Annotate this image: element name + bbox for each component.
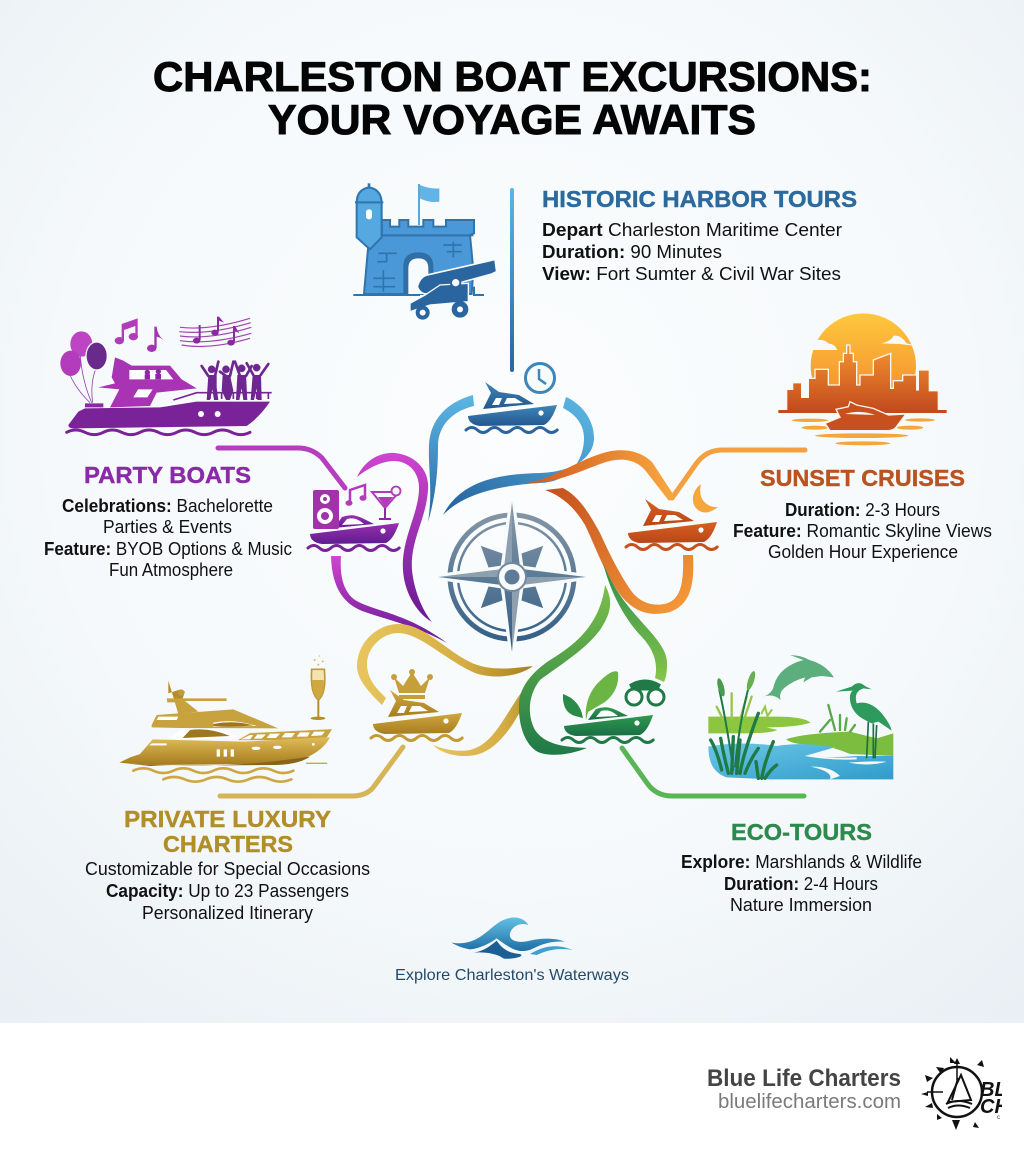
ribbon: blue left <box>428 395 474 522</box>
text block: party boats: Parties & Events <box>103 517 232 537</box>
text block: historic harbor tours: Duration: 90 Minutes <box>542 242 722 262</box>
icon: sunset skyline illustration <box>778 313 947 445</box>
connector: harbor tours <box>510 188 514 372</box>
icon: compass rose <box>436 500 588 654</box>
connector: eco-tours <box>622 748 804 796</box>
ribbon: purple lower <box>331 556 447 643</box>
text block: eco-tours: ECO-TOURS <box>731 819 872 845</box>
text block: party boats: Fun Atmosphere <box>109 560 233 580</box>
ribbon: gold right <box>433 663 548 756</box>
text block: private luxury charters: Customizable for Special Occasions <box>85 859 370 879</box>
text block: eco-tours: Nature Immersion <box>730 895 872 915</box>
icon: wave logo <box>452 918 573 959</box>
ribbon: purple right <box>357 453 432 622</box>
text block: sunset cruises: Duration: 2-3 Hours <box>785 500 940 520</box>
connector: sunset cruises <box>672 450 805 498</box>
icon: cocktail <box>372 486 400 519</box>
footer brand text: Blue Life Charters <box>707 1065 901 1092</box>
icon: eco boat with leaves and binoculars <box>562 671 664 742</box>
text block: historic harbor tours <box>542 186 857 284</box>
icon: marshland wildlife illustration <box>708 655 893 779</box>
footer logo: CH <box>980 1096 1009 1118</box>
text block: private luxury charters <box>85 806 370 923</box>
footer brand text <box>707 1065 901 1113</box>
ribbon: orange upper <box>527 450 675 501</box>
text block: eco-tours: Explore: Marshlands & Wildlife <box>681 852 922 872</box>
text block: private luxury charters: Personalized Itinerary <box>142 903 313 923</box>
text block: private luxury charters: CHARTERS <box>163 831 293 857</box>
footer logo <box>921 1057 1009 1130</box>
footer logo: c <box>997 1115 1000 1121</box>
text block: party boats: Feature: BYOB Options & Music <box>44 539 292 559</box>
connector: party boats <box>218 448 345 488</box>
caption: explore waterways: Explore Charleston's Waterways <box>395 967 629 984</box>
text block: sunset cruises: SUNSET CRUISES <box>760 465 965 491</box>
ribbon: blue right <box>443 397 594 515</box>
footer panel <box>0 1023 1024 1154</box>
text block: sunset cruises: Feature: Romantic Skyline Views <box>733 521 992 541</box>
text block: private luxury charters: PRIVATE LUXURY <box>124 806 331 832</box>
icon: clock <box>526 364 554 392</box>
text block: eco-tours <box>681 819 922 915</box>
title: YOUR VOYAGE AWAITS <box>268 96 756 143</box>
icon: sunset boat with moon <box>626 484 718 550</box>
connector: private charters <box>220 747 403 796</box>
title: CHARLESTON BOAT EXCURSIONS: <box>153 53 872 100</box>
ribbons around compass <box>331 395 693 756</box>
icon: fort and cannon <box>353 183 497 318</box>
text block: historic harbor tours: View: Fort Sumter & Civil War Sites <box>542 264 841 284</box>
icon: crown <box>391 669 433 699</box>
icon: luxury boat with crown <box>371 669 462 740</box>
text block: party boats: PARTY BOATS <box>84 462 251 488</box>
icon: moon <box>693 484 718 513</box>
text block: private luxury charters: Capacity: Up to 23 Passengers <box>106 881 349 901</box>
footer logo: BL <box>980 1079 1007 1101</box>
icon: speaker <box>313 490 339 529</box>
text block: historic harbor tours: Depart Charleston Maritime Center <box>542 220 842 240</box>
footer brand text: bluelifecharters.com <box>718 1091 901 1113</box>
text block: eco-tours: Duration: 2-4 Hours <box>724 874 878 894</box>
text block: historic harbor tours: HISTORIC HARBOR TOURS <box>542 186 857 212</box>
icon: music note <box>350 485 365 503</box>
icon: harbor boat with clock <box>466 364 557 432</box>
icon: party boat illustration <box>60 317 272 435</box>
ribbon: green left <box>519 585 610 755</box>
text block: sunset cruises: Golden Hour Experience <box>768 542 958 562</box>
icon: party boat with speaker, note and cocktail <box>308 485 400 550</box>
ribbon: orange lower <box>545 488 693 614</box>
title <box>153 53 872 143</box>
text block: party boats <box>44 462 292 580</box>
icon: yacht and champagne illustration <box>119 655 332 782</box>
text block: party boats: Celebrations: Bachelorette <box>62 496 273 516</box>
ribbon: gold left <box>357 624 533 705</box>
ribbon: green right <box>603 563 667 682</box>
icon: binoculars <box>626 681 664 705</box>
icon: leaves <box>563 671 618 720</box>
text block: sunset cruises <box>733 465 992 562</box>
